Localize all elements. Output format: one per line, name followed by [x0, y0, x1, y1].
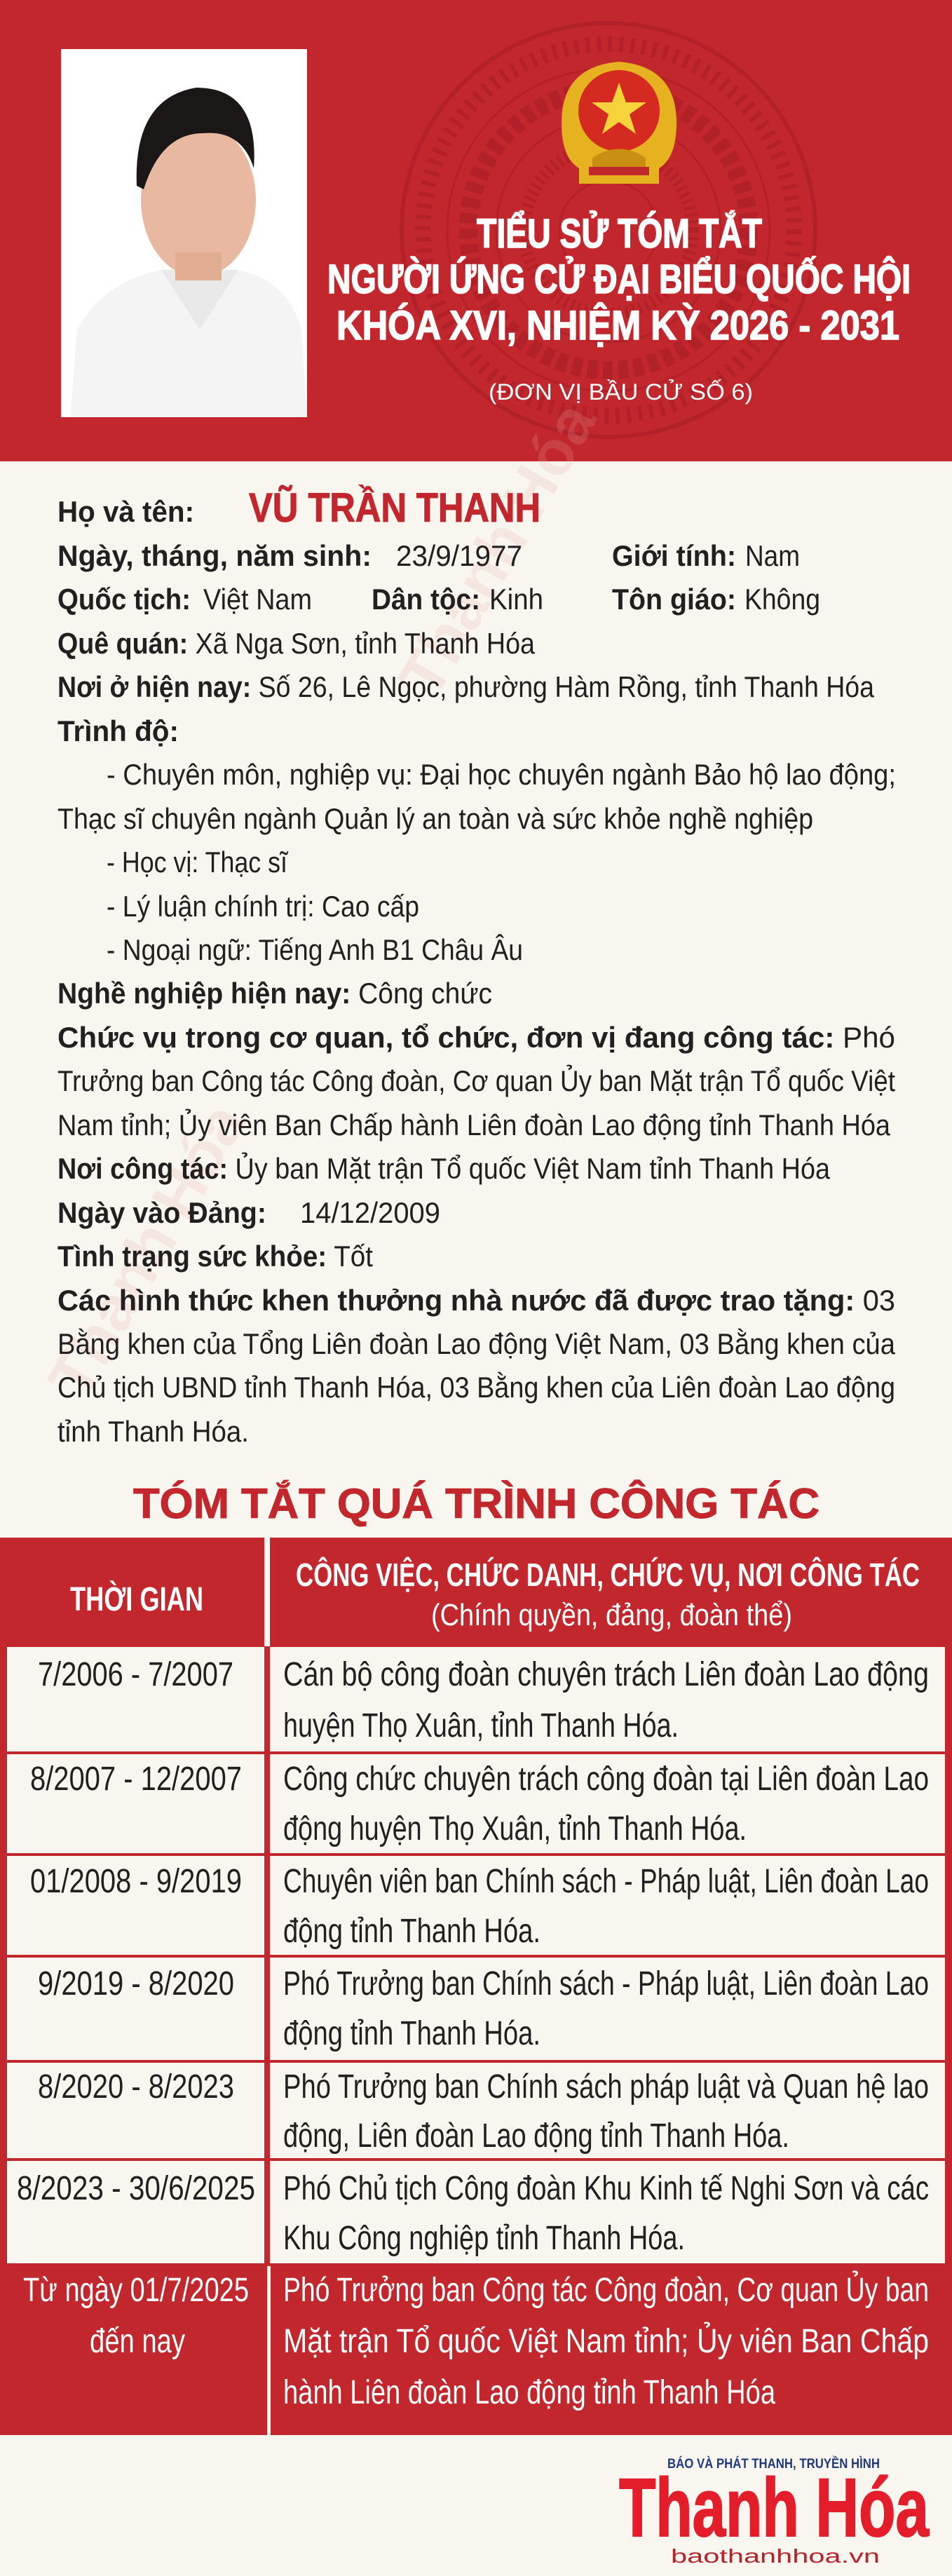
table rows text: 8/2007 - 12/2007	[30, 1761, 242, 1798]
panel: personal info: 23/9/1977	[396, 539, 522, 572]
panel: personal info: - Ngoại ngữ: Tiếng Anh B1 Châu Âu	[107, 933, 523, 966]
panel: personal info: Nơi công tác: Ủy ban Mặt trận Tổ quốc Việt Nam tỉnh Thanh Hóa	[57, 1151, 831, 1185]
panel: personal info: - Chuyên môn, nghiệp vụ: Đại học chuyên ngành Bảo hộ lao động;	[107, 758, 896, 791]
panel: personal info: Chức vụ trong cơ quan, tổ chức, đơn vị đang công tác: Phó	[57, 1021, 895, 1054]
panel: personal info: Các hình thức khen thưởng nhà nước đã được trao tặng: 03	[57, 1284, 895, 1317]
panel: personal info: - Lý luận chính trị: Cao cấp	[107, 890, 419, 923]
table rows text: 9/2019 - 8/2020	[38, 1965, 234, 2002]
table: work history	[0, 1538, 952, 2435]
section heading: TÓM TẮT QUÁ TRÌNH CÔNG TÁC	[133, 1480, 820, 1527]
panel: personal info: Tôn giáo:	[612, 583, 736, 616]
panel: personal info: Việt Nam	[203, 583, 312, 616]
table header: (Chính quyền, đảng, đoàn thể)	[431, 1598, 792, 1632]
panel: personal info: Không	[744, 583, 820, 616]
subtitle: (ĐƠN VỊ BẦU CỬ SỐ 6)	[489, 379, 753, 405]
watermarks: Thanh Hóa	[386, 390, 610, 708]
table rows text: 01/2008 - 9/2019	[30, 1863, 242, 1900]
panel: personal info: Trình độ:	[57, 714, 179, 747]
panel: personal info: Ngày, tháng, năm sinh:	[57, 539, 372, 572]
panel: personal info: Ngày vào Đảng:	[57, 1196, 266, 1229]
table rows text: động tỉnh Thanh Hóa.	[283, 1913, 540, 1950]
panel: personal info: 14/12/2009	[300, 1196, 440, 1229]
panel: personal info: Nơi ở hiện nay: Số 26, Lê Ngọc, phường Hàm Rồng, tỉnh Thanh Hóa	[57, 670, 875, 703]
current position row	[23, 2270, 929, 2411]
table rows text: 8/2023 - 30/6/2025	[17, 2170, 255, 2207]
table rows text: động, Liên đoàn Lao động tỉnh Thanh Hóa.	[283, 2117, 789, 2155]
panel: personal info: Tình trạng sức khỏe: Tốt	[57, 1240, 373, 1273]
panel: personal info: Kinh	[489, 583, 543, 616]
header panel	[0, 0, 952, 461]
panel: personal info	[57, 485, 896, 1448]
table header: THỜI GIAN	[70, 1580, 203, 1618]
table header	[70, 1538, 920, 1646]
watermarks: Thanh Hóa	[36, 1091, 259, 1409]
watermarks: Thanh Hóa	[583, 1792, 806, 2110]
table cells	[7, 1647, 945, 2263]
footer logo: baothanhhoa.vn	[671, 2545, 880, 2567]
panel: personal info: Giới tính:	[612, 539, 736, 572]
panel: personal info: Bằng khen của Tổng Liên đoàn Lao động Việt Nam, 03 Bằng khen của	[57, 1327, 896, 1360]
watermarks	[36, 390, 806, 2110]
panel: personal info: Thạc sĩ chuyên ngành Quản lý an toàn và sức khỏe nghề nghiệp	[57, 802, 813, 835]
panel: personal info: Nghề nghiệp hiện nay: Công chức	[57, 977, 492, 1010]
icon: national emblem	[562, 62, 676, 184]
current position row: đến nay	[90, 2323, 185, 2360]
table rows text: động huyện Thọ Xuân, tỉnh Thanh Hóa.	[283, 1810, 747, 1848]
table rows text: Khu Công nghiệp tỉnh Thanh Hóa.	[283, 2220, 685, 2257]
current position row: hành Liên đoàn Lao động tỉnh Thanh Hóa	[283, 2374, 775, 2411]
table rows text: huyện Thọ Xuân, tỉnh Thanh Hóa.	[283, 1707, 679, 1744]
drum background pattern	[402, 23, 815, 437]
table rows text	[17, 1656, 929, 2257]
table rows text: 7/2006 - 7/2007	[38, 1656, 233, 1693]
panel: personal info: Quê quán: Xã Nga Sơn, tỉnh Thanh Hóa	[57, 627, 536, 660]
table rows text: động tỉnh Thanh Hóa.	[283, 2015, 540, 2052]
panel: personal info: tỉnh Thanh Hóa.	[57, 1415, 249, 1448]
title: TIỂU SỬ TÓM TẮT	[477, 211, 762, 257]
panel: personal info: - Học vị: Thạc sĩ	[107, 846, 289, 879]
title	[327, 211, 911, 348]
panel: personal info: Dân tộc:	[372, 583, 480, 616]
panel: personal info: Quốc tịch:	[57, 583, 191, 616]
panel: personal info: Họ và tên:	[57, 495, 194, 528]
candidate name: VŨ TRẦN THANH	[249, 485, 540, 531]
panel: personal info: Nam	[745, 539, 800, 572]
footer logo: BÁO VÀ PHÁT THANH, TRUYỀN HÌNH	[667, 2456, 880, 2472]
photo	[61, 49, 307, 417]
current position row: Từ ngày 01/7/2025	[23, 2272, 249, 2309]
table rows text: 8/2020 - 8/2023	[38, 2068, 234, 2106]
